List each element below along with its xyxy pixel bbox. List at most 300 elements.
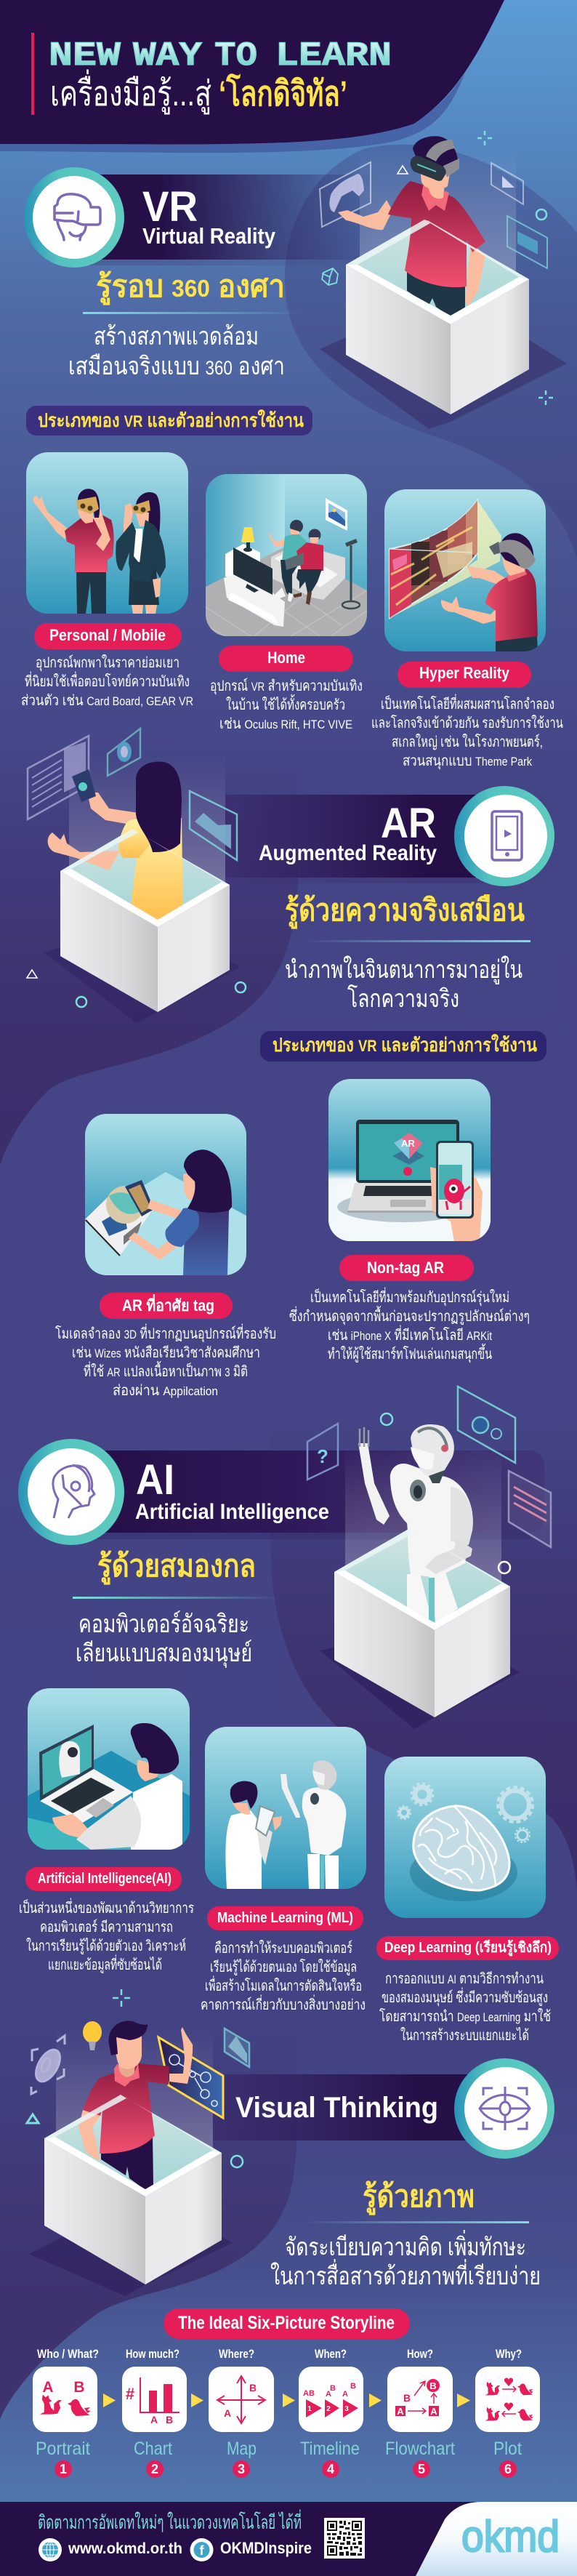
brain	[413, 1806, 509, 1890]
arm	[148, 1200, 185, 1221]
description: ในการเรียนรู้ได้ด้วยตัวเอง วิเคราะห์	[26, 1938, 186, 1955]
image	[28, 1688, 190, 1850]
tile: Timeline: B	[350, 2382, 356, 2391]
AI icon circle	[18, 1439, 124, 1545]
storyline numbers	[55, 2460, 517, 2478]
storyline questions: How much?	[126, 2347, 179, 2361]
neck	[118, 2063, 135, 2077]
tile: Timeline: AB	[303, 2389, 315, 2398]
person shirt	[83, 2063, 169, 2154]
box shadow	[320, 1625, 520, 1729]
person arm down	[78, 2110, 100, 2161]
storyline arrows	[103, 2394, 470, 2407]
storyline questions: Who / What?	[37, 2347, 99, 2361]
woman body	[131, 818, 183, 921]
VR yellow headline: รู้รอบ 360 องศา	[96, 269, 285, 305]
storyline numbers: 3	[238, 2462, 245, 2476]
facebook name: OKMDInspire	[220, 2539, 312, 2557]
tile: Portrait: A	[42, 2379, 54, 2396]
robot head	[411, 1424, 454, 1483]
description: อุปกรณ์ VR สำหรับความบันเทิง	[210, 678, 363, 695]
man cardboard glasses	[76, 497, 99, 514]
image	[85, 1114, 246, 1275]
Artificial Intelligence: Artificial Intelligence	[135, 1500, 329, 1524]
red accent bar	[31, 33, 34, 115]
description: ในการสร้างระบบแยกแยะได้	[400, 2027, 529, 2044]
tile: Map: A	[224, 2407, 231, 2419]
description: คาดการณ์เกี่ยวกับบางสิ่งบางอย่าง	[201, 1994, 366, 2013]
VR icon circle	[24, 167, 124, 268]
section: Visual Thinking banner	[213, 2058, 554, 2159]
light beam	[345, 1447, 501, 1585]
tile: Chart	[122, 2367, 187, 2432]
decorative marks	[27, 970, 246, 1007]
box faces	[44, 2138, 145, 2284]
card: AR tag	[55, 1114, 276, 1399]
description: ส่องผ่าน Appilcation	[113, 1383, 218, 1399]
question panel	[307, 1424, 338, 1480]
light beam	[56, 2029, 213, 2156]
tile: Timeline: B	[330, 2384, 336, 2393]
VT band	[213, 2074, 509, 2140]
storyline names: Map	[227, 2439, 257, 2459]
man pants	[76, 571, 106, 614]
woman face	[135, 512, 149, 526]
card: AR tag: AR ที่อาศัย tag	[122, 1293, 214, 1315]
tile: Flowchart: B	[429, 2380, 437, 2391]
card: Hyper Reality: Hyper Reality	[419, 664, 510, 682]
AI yellow headline: รู้ด้วยสมองกล	[97, 1549, 256, 1585]
AI divider	[73, 1597, 280, 1599]
storyline questions: Where?	[219, 2347, 254, 2361]
AR yellow headline: รู้ด้วยความจริงเสมือน	[285, 893, 525, 929]
label	[207, 1906, 363, 1930]
book	[85, 1195, 151, 1256]
description: สวนสนุกแบบ Theme Park	[403, 753, 532, 770]
tile: Flowchart: B	[403, 2392, 411, 2404]
hand	[273, 1816, 282, 1831]
description	[289, 1287, 530, 1363]
label	[376, 1936, 559, 1960]
card: Home: Home	[267, 649, 305, 667]
description: เช่น iPhone X ที่มีเทคโนโลยี ARKit	[328, 1325, 492, 1344]
AR band	[225, 795, 509, 878]
description: การออกแบบ AI ตามวิธีการทำงาน	[385, 1971, 544, 1987]
VT divider	[304, 2221, 529, 2223]
robot	[281, 1760, 346, 1889]
orbit panel	[108, 729, 140, 776]
coat	[131, 1774, 182, 1850]
text block: AI headline: เลียนแบบสมองมนุษย์	[76, 1640, 252, 1668]
VR band shadow	[87, 260, 378, 265]
box interior	[60, 829, 230, 927]
card: Deep Learning	[376, 1757, 559, 2044]
AI band	[94, 1450, 544, 1533]
VR divider	[83, 312, 302, 314]
subtitle highlight: ‘โลกดิจิทัล’	[219, 73, 347, 113]
man hair	[78, 489, 100, 518]
description: ส่วนตัว เช่น Card Board, GEAR VR	[21, 693, 193, 709]
head	[233, 1803, 251, 1815]
tile: Chart: B	[166, 2414, 173, 2425]
man arm	[467, 566, 505, 585]
illustration: AR person in box	[27, 729, 246, 1023]
label	[25, 1867, 182, 1891]
laptop base	[347, 1183, 465, 1213]
person face	[116, 2036, 142, 2069]
picture	[326, 498, 347, 531]
mic stand	[342, 539, 360, 609]
text block: AR headline	[285, 893, 530, 1013]
description: เพื่อสร้างโมเดลในการตัดสินใจหรือ	[205, 1975, 362, 1994]
illustration: robot in box	[307, 1387, 551, 1729]
illustration: VR person in box	[320, 131, 567, 429]
panorama screen	[390, 500, 477, 618]
card: Non-tag AR	[289, 1079, 530, 1363]
box interior	[44, 2095, 222, 2196]
box interior	[346, 220, 529, 324]
storyline names: Timeline	[300, 2439, 360, 2459]
hair	[136, 761, 182, 852]
background curve: AI section	[270, 1425, 577, 1890]
man hand to glasses	[93, 509, 110, 551]
person hair	[108, 2021, 148, 2055]
card: Non-tag AR: Non-tag AR	[367, 1259, 444, 1277]
storyline questions: How?	[407, 2347, 433, 2361]
background curve: Visual Thinking section	[0, 2021, 296, 2419]
laptop screen	[356, 1120, 459, 1183]
AR heading: AR	[381, 800, 436, 847]
storyline names: Chart	[134, 2439, 172, 2459]
AR band shadow	[225, 878, 487, 883]
description	[210, 678, 363, 732]
hair	[184, 1149, 232, 1213]
pill: storyline heading	[164, 2308, 410, 2339]
scientist coat	[225, 1810, 270, 1889]
card: Personal / Mobile	[21, 452, 193, 709]
face	[183, 1171, 200, 1200]
description: ทำให้ผู้ใช้สมาร์ทโฟนเล่นเกมสนุกขึ้น	[328, 1344, 492, 1363]
VR headset	[411, 140, 459, 181]
title: new way to learn: NEW	[49, 37, 121, 75]
AI heading: AI	[136, 1456, 174, 1504]
tile: Timeline: 2	[326, 2405, 331, 2413]
phone	[436, 1141, 474, 1219]
card: Personal / Mobile: Personal / Mobile	[49, 626, 166, 644]
title: new way to learn: TO	[214, 37, 257, 75]
pill: AR types	[260, 1031, 546, 1062]
controller panel	[320, 162, 371, 227]
icon: facebook: f	[199, 2543, 205, 2558]
tile: Plot	[475, 2367, 540, 2432]
storyline numbers: 2	[151, 2462, 158, 2476]
box shadow	[44, 916, 240, 1023]
card: Artificial Intelligence	[19, 1688, 194, 1974]
person shirt	[388, 181, 485, 287]
floor	[206, 547, 367, 636]
bulb	[83, 2021, 102, 2050]
background curve: VR section	[285, 145, 577, 560]
tile: Timeline: A	[326, 2390, 331, 2399]
robot shoulder	[451, 1487, 473, 1545]
image	[328, 1079, 491, 1241]
description: เรียนรู้ได้ด้วยตนเอง โดยใช้ข้อมูล	[210, 1959, 357, 1976]
decorative marks	[27, 1989, 243, 2167]
AR icon circle	[454, 786, 554, 886]
person neck and collar	[421, 183, 449, 211]
light beam	[360, 149, 516, 278]
laptop screen	[39, 1725, 94, 1801]
text block: AR headline: โลกความจริง	[347, 984, 459, 1013]
glasses panel	[507, 216, 547, 268]
TV stand	[224, 571, 285, 627]
board	[158, 2037, 223, 2118]
robot body	[390, 1464, 472, 1578]
card: Machine Learning	[201, 1727, 366, 2013]
box faces	[60, 871, 158, 1012]
box shadow	[29, 2196, 233, 2296]
controller	[285, 553, 304, 570]
phone	[125, 1180, 154, 1216]
brain shadow	[410, 1843, 517, 1901]
card: Artificial Intelligence: Artificial Intelligence(AI)	[38, 1871, 172, 1887]
robot folded arm	[425, 1538, 472, 1574]
sleeve	[165, 1208, 199, 1247]
person raised arm	[169, 2027, 193, 2084]
card: Deep Learning: Deep Learning (เรียนรู้เชิงลึก)	[384, 1939, 552, 1957]
woman hair	[136, 492, 160, 537]
storyline names	[36, 2439, 522, 2459]
description	[55, 1323, 276, 1399]
decorative circles	[381, 1413, 510, 1573]
tile: Timeline: A	[342, 2390, 348, 2399]
person right arm	[465, 244, 485, 313]
description: เช่น Oculus Rift, HTC VIVE	[219, 716, 352, 732]
man shirt	[65, 515, 114, 572]
man raised arm	[33, 496, 67, 539]
description: ที่นิยมใช้เพื่อตอบโจทย์ความบันเทิง	[25, 671, 190, 690]
box shadow	[320, 291, 567, 429]
VT yellow headline: รู้ด้วยภาพ	[363, 2179, 475, 2215]
footer	[0, 2502, 577, 2576]
label	[34, 623, 182, 649]
description	[21, 654, 193, 709]
light cone	[390, 500, 501, 618]
man pants	[496, 636, 538, 651]
section: VR banner	[24, 167, 378, 268]
description: อุปกรณ์พกพาในราคาย่อมเยา	[36, 654, 179, 672]
image	[205, 1727, 366, 1889]
card: Home	[206, 474, 367, 732]
description: เป็นเทคโนโลยีที่มาพร้อมกับอุปกรณ์รุ่นใหม่	[310, 1287, 509, 1307]
body	[183, 1211, 229, 1275]
man head	[489, 533, 536, 576]
description: โดยสามารถนำ Deep Learning มาใช้	[379, 2008, 551, 2025]
AR logo	[392, 1133, 424, 1165]
card: Hyper Reality	[371, 489, 563, 770]
tile: Flowchart	[387, 2367, 453, 2432]
Virtual Reality: Virtual Reality	[142, 223, 276, 249]
Augmented Reality: Augmented Reality	[259, 841, 437, 865]
icon: globe	[39, 2538, 62, 2561]
gears	[398, 1783, 533, 1842]
image	[26, 452, 188, 614]
QR code	[324, 2518, 365, 2559]
person legs	[101, 2135, 153, 2190]
woman hand	[153, 578, 161, 598]
man head	[77, 507, 93, 523]
description: คือการทำให้ระบบคอมพิวเตอร์	[214, 1940, 352, 1957]
person in red	[293, 529, 323, 605]
side table	[225, 544, 260, 577]
sleeve	[119, 819, 151, 858]
AI band shadow	[94, 1533, 530, 1539]
description: เช่น Wizes หนังสือเรียนวิชาสังคมศึกษา	[72, 1345, 260, 1361]
person left arm	[338, 200, 392, 230]
VR band	[87, 174, 378, 260]
card sky	[85, 1114, 246, 1221]
tablet	[256, 1806, 275, 1836]
question panel: ?	[317, 1445, 328, 1467]
header dark shape	[0, 0, 504, 145]
description	[371, 694, 563, 770]
description: แยกแยะข้อมูลที่ซับซ้อนได้	[48, 1954, 162, 1974]
storyline questions	[37, 2347, 522, 2361]
box front rim and faces	[346, 265, 451, 414]
chart panel	[190, 791, 237, 860]
sofa	[271, 551, 345, 600]
text block: VR headline: เสมือนจริงแบบ 360 องศา	[68, 353, 285, 380]
header shadow curve	[0, 73, 465, 153]
footer call to action: ติดตามการอัพเดทใหม่ๆ ในแวดวงเทคโนโลยี ได้ที่	[38, 2509, 302, 2533]
description	[379, 1971, 551, 2044]
section: AI banner	[18, 1439, 544, 1545]
woman arm	[48, 832, 120, 870]
Visual Thinking heading: Visual Thinking	[235, 2092, 438, 2124]
triangle panel	[491, 163, 523, 204]
AR logo: AR	[401, 1138, 415, 1149]
description: คอมพิวเตอร์ มีความสามารถ	[40, 1919, 173, 1935]
AR divider	[304, 940, 530, 942]
description	[19, 1898, 194, 1974]
woman raised arm	[124, 503, 133, 533]
title: new way to learn: WAY	[133, 37, 202, 75]
person in teal	[267, 520, 307, 602]
tile: Flowchart: A	[430, 2406, 437, 2417]
storyline numbers: 1	[60, 2462, 67, 2476]
storyline numbers: 4	[327, 2462, 334, 2476]
description	[201, 1940, 366, 2013]
illustration: Visual Thinking person in box	[27, 1989, 249, 2296]
robot legs	[407, 1570, 458, 1625]
hand	[430, 1167, 483, 1241]
phone	[72, 769, 96, 802]
light beam	[69, 756, 225, 886]
text block: Visual Thinking headline	[270, 2179, 541, 2290]
hand	[52, 1814, 91, 1838]
woman skirt	[129, 562, 159, 605]
pill: VR types: ประเภทของ VR และตัวอย่างการใช้งาน	[38, 409, 304, 431]
title: new way to learn: LEARN	[275, 37, 392, 75]
floor tiles	[206, 583, 367, 636]
woman legs	[132, 605, 157, 614]
lamp	[241, 527, 254, 552]
neck	[137, 1760, 164, 1781]
tile: Chart: A	[150, 2414, 158, 2425]
tile: Timeline	[299, 2367, 363, 2432]
box faces	[334, 1572, 435, 1717]
eye panel	[31, 2036, 65, 2094]
card: Machine Learning: Machine Learning (ML)	[217, 1910, 353, 1926]
woman white top	[134, 529, 142, 562]
box interior	[334, 1528, 510, 1630]
subtitle: เครื่องมือรู้...สู่	[50, 69, 211, 115]
gear panel	[458, 1387, 515, 1463]
monster	[444, 1179, 470, 1210]
background curve: AR section	[0, 756, 298, 1165]
AI description: คอมพิวเตอร์อัจฉริยะ	[78, 1610, 249, 1638]
tile: Portrait: B	[73, 2379, 85, 2396]
footer white wedge	[416, 2502, 577, 2576]
tile: Map: B	[249, 2382, 257, 2394]
upper arm to phone	[87, 793, 138, 825]
woman cardboard glasses	[132, 500, 150, 514]
tile: Portrait	[33, 2367, 97, 2432]
play	[403, 1167, 412, 1176]
chest eye	[410, 1480, 426, 1501]
robot raised arm	[358, 1443, 390, 1525]
icon: facebook	[190, 2538, 214, 2561]
storyline names: Flowchart	[385, 2439, 455, 2459]
person legs	[407, 270, 465, 317]
label	[100, 1293, 233, 1319]
website: www.okmd.or.th	[68, 2540, 182, 2557]
description: เป็นส่วนหนึ่งของพัฒนาด้านวิทยาการ	[19, 1898, 194, 1917]
label	[398, 662, 531, 688]
label	[339, 1255, 474, 1281]
title: new way to learn	[49, 37, 392, 75]
storyline questions: Why?	[496, 2347, 522, 2361]
TV	[233, 547, 273, 595]
tile: Map	[209, 2367, 274, 2432]
person hair	[413, 136, 458, 174]
footer background	[0, 2502, 577, 2576]
laptop base	[40, 1769, 133, 1823]
photo panel	[225, 2029, 249, 2067]
VT icon circle	[454, 2058, 554, 2159]
description: ที่ใช้ AR แปลงเนื้อหาเป็นภาพ 3 มิติ	[84, 1361, 248, 1380]
storyline questions: When?	[315, 2347, 347, 2361]
decorative marks	[322, 131, 553, 405]
tile: Timeline: 1	[307, 2405, 312, 2413]
woman jacket	[116, 520, 166, 582]
man other arm	[440, 596, 496, 624]
tile: Chart: #	[126, 2385, 134, 2403]
image	[384, 489, 546, 651]
tile: Timeline: 3	[344, 2405, 349, 2413]
storyline numbers: 5	[418, 2462, 425, 2476]
text block: VR headline	[68, 269, 302, 380]
storyline names: Portrait	[36, 2439, 90, 2459]
storyline numbers: 6	[504, 2462, 512, 2476]
VR heading: VR	[142, 183, 198, 230]
pill: VR types	[26, 406, 312, 436]
pill: storyline heading: The Ideal Six-Picture Storyline	[178, 2313, 395, 2333]
label	[219, 646, 353, 672]
storyline names: Plot	[493, 2439, 522, 2459]
VR description: สร้างสภาพแวดล้อม	[94, 323, 259, 350]
description: โมเดลจำลอง 3D ที่ปรากฏบนอุปกรณ์ที่รองรับ	[55, 1323, 276, 1343]
